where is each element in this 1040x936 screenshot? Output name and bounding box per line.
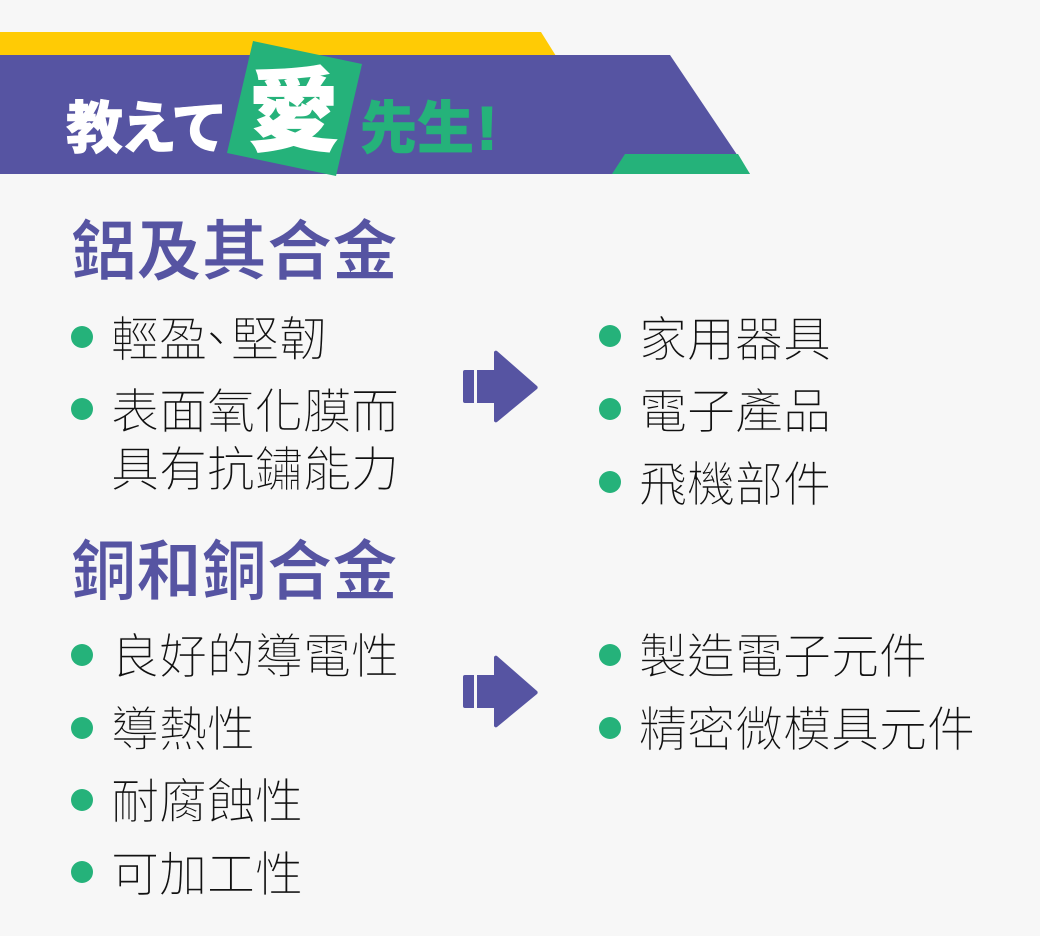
heading: copper: 銅和銅合金 xyxy=(71,535,398,608)
banner title: ! xyxy=(477,95,497,162)
property list: aluminium: 輕盈、堅韌 xyxy=(111,314,327,367)
use list: aluminium: 飛機部件 xyxy=(639,459,831,512)
use list: aluminium: 電子產品 xyxy=(639,386,831,439)
arrow: aluminium xyxy=(463,350,538,422)
banner title: 教えて xyxy=(66,97,225,161)
use list: aluminium: 家用器具 xyxy=(639,314,831,367)
property list: copper xyxy=(71,631,399,902)
banner title: 先生 xyxy=(360,97,474,161)
heading: aluminium: 鋁及其合金 xyxy=(71,215,398,288)
property list: copper: 可加工性 xyxy=(111,849,303,902)
use list: copper: 精密微模具元件 xyxy=(639,704,975,757)
property list: copper: 耐腐蝕性 xyxy=(111,776,303,829)
banner title: 愛 xyxy=(248,62,339,163)
use list: aluminium xyxy=(599,314,831,512)
banner xyxy=(0,32,750,176)
arrow: copper xyxy=(463,656,538,728)
property list: copper: 良好的導電性 xyxy=(111,631,399,684)
property list: aluminium: 具有抗鏽能力 xyxy=(111,444,399,497)
property list: aluminium: 表面氧化膜而 xyxy=(111,386,399,439)
banner title xyxy=(66,62,497,163)
use list: copper: 製造電子元件 xyxy=(639,631,927,684)
use list: copper xyxy=(599,631,975,757)
property list: copper: 導熱性 xyxy=(111,704,255,757)
property list: aluminium xyxy=(71,314,399,497)
